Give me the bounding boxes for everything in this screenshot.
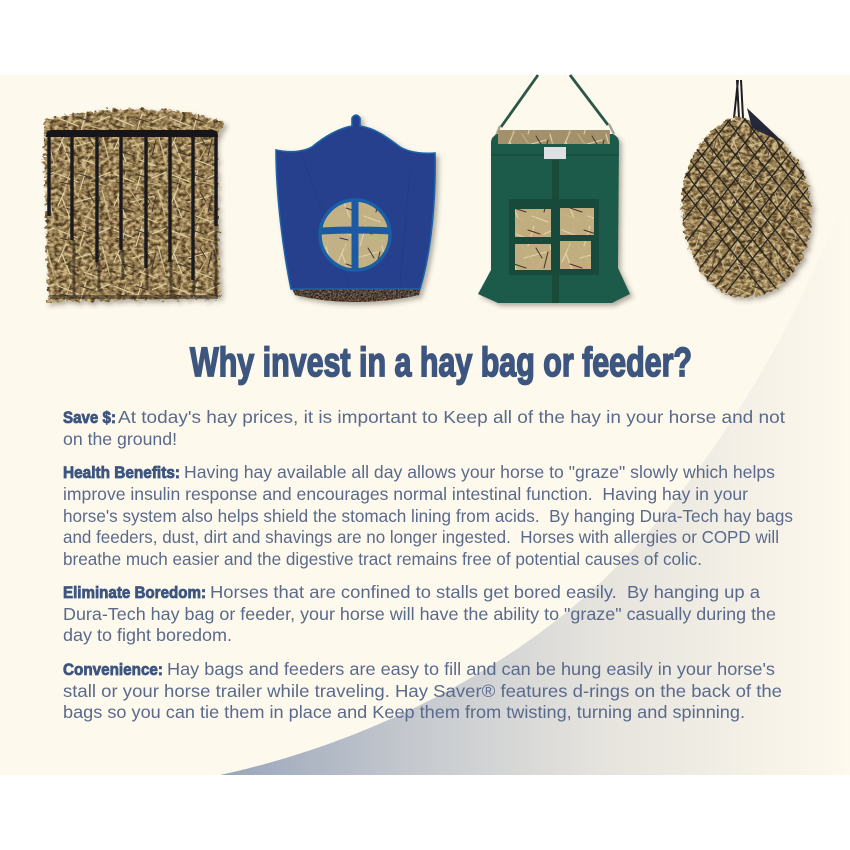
- product: blue hay bag: [276, 115, 435, 302]
- product label tag: [544, 147, 566, 159]
- text block: Convenience: Hay bags and feeders are easy to fill and can be hung easily in your horse's: [167, 659, 775, 679]
- text block: Health Benefits: Having hay available all day allows your horse to "graze" slowly which helps: [184, 462, 775, 482]
- text block: Eliminate Boredom: Dura-Tech hay bag or feeder, your horse will have the ability to "graze" casually during the: [63, 604, 776, 624]
- product: wire hay feeder: [40, 104, 226, 304]
- label: Eliminate Boredom: Eliminate Boredom:: [63, 583, 206, 602]
- label: Convenience: Convenience:: [63, 660, 163, 679]
- text block: Convenience: [63, 659, 782, 722]
- text block: Eliminate Boredom: [63, 582, 776, 645]
- label: Health Benefits: Health Benefits:: [63, 463, 180, 482]
- label: Save $: Save $:: [63, 408, 116, 427]
- text block: Eliminate Boredom: day to fight boredom.: [63, 625, 232, 645]
- text block: Eliminate Boredom: Horses that are confined to stalls get bored easily. By hanging up a: [210, 582, 760, 602]
- text block: Health Benefits: [63, 462, 793, 569]
- product: hay net: [680, 80, 818, 304]
- text block: Health Benefits: improve insulin response and encourages normal intestinal function. Having hay in your: [63, 484, 748, 504]
- text block: Convenience: bags so you can tie them in place and Keep them from twisting, turning and spinning.: [63, 702, 745, 722]
- text block: Save $: [63, 407, 785, 449]
- text block: Save $: At today's hay prices, it is important to Keep all of the hay in your horse and not: [118, 407, 785, 427]
- text block: Convenience: stall or your horse trailer while traveling. Hay Saver® features d-rings on the back of the: [63, 681, 782, 701]
- text block: Health Benefits: and feeders, dust, dirt and shavings are no longer ingested. Horses with allergies or COPD will: [63, 527, 779, 547]
- product: green hay bag: [478, 75, 630, 303]
- text block: Health Benefits: horse's system also helps shield the stomach lining from acids. By hanging Dura-Tech hay bags: [63, 506, 793, 526]
- gradient swoosh: [220, 195, 850, 775]
- text block: Health Benefits: breathe much easier and the digestive tract remains free of potential causes of colic.: [63, 549, 702, 569]
- title: Why invest in a hay bag or feeder?: [190, 339, 692, 385]
- text block: Save $: on the ground!: [63, 429, 177, 449]
